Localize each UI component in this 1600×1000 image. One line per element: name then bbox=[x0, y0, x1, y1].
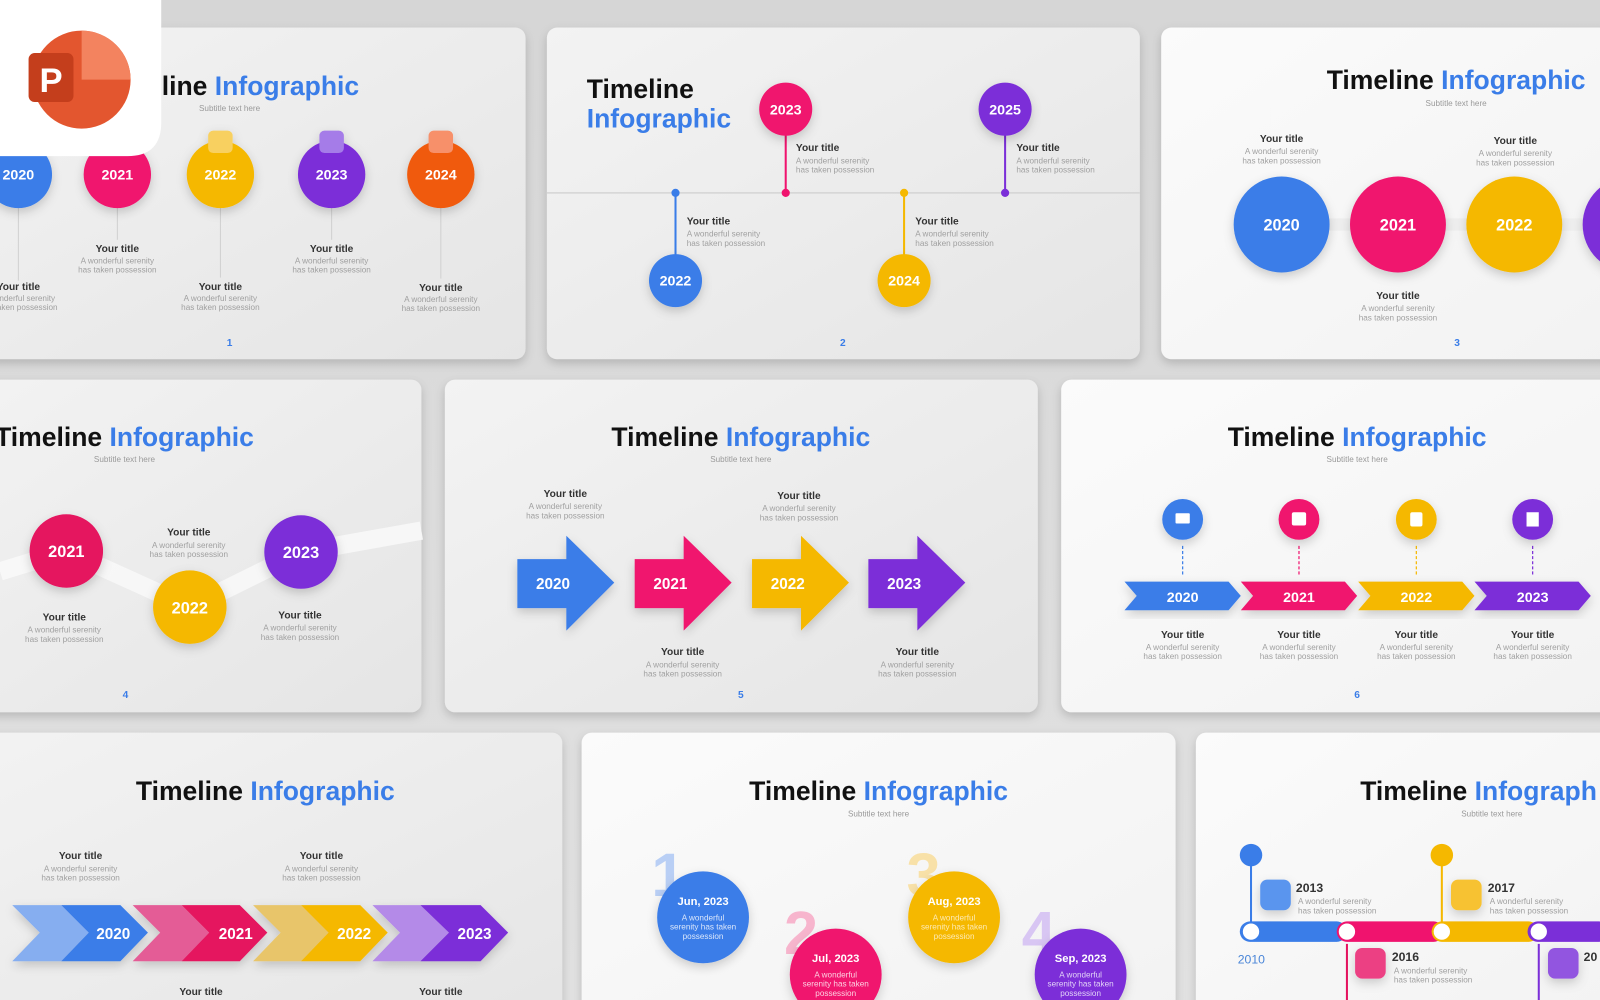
panel: slide 3: has taken possession bbox=[1242, 156, 1321, 165]
panel: slide 4: 2023 bbox=[283, 544, 319, 562]
panel: slide 6: has taken possession bbox=[1143, 652, 1222, 661]
panel: slide 7: 2023 bbox=[457, 926, 492, 943]
panel: slide 6: Your title bbox=[1161, 630, 1205, 641]
panel: slide 2: 2 bbox=[840, 338, 846, 349]
panel: slide 2: Your title bbox=[687, 216, 730, 227]
chevron bar slide 6 bbox=[1124, 582, 1591, 610]
panel: slide 4: has taken possession bbox=[261, 633, 339, 642]
title 7: Timeline Infographic bbox=[136, 776, 395, 806]
panel: slide 6: has taken possession bbox=[1377, 652, 1456, 661]
panel: slide 3: A wonderful serenity bbox=[1479, 149, 1553, 158]
panel: slide 8: serenity has taken bbox=[670, 923, 736, 932]
panel: slide 5: Subtitle text here bbox=[710, 455, 772, 464]
panel: slide 8: A wonderful bbox=[682, 913, 725, 922]
panel: slide 5: A wonderful serenity bbox=[646, 660, 720, 669]
panel: slide 8: Aug, 2023 bbox=[928, 896, 981, 908]
panel: slide 9: has taken possession bbox=[1490, 906, 1568, 915]
panel: slide 2: Your title bbox=[915, 216, 959, 227]
panel: slide 5: Your title bbox=[896, 647, 939, 658]
title 4: Timeline Infographic bbox=[0, 422, 254, 452]
panel: slide 2 bbox=[547, 28, 1140, 359]
panel: slide 8: possession bbox=[934, 932, 974, 941]
panel: slide 5: has taken possession bbox=[878, 670, 957, 679]
panel: slide 4: has taken possession bbox=[150, 550, 228, 559]
panel: slide 7: has taken possession bbox=[41, 874, 120, 883]
panel: slide 8: serenity has taken bbox=[921, 923, 987, 932]
panel: slide 4: A wonderful serenity bbox=[28, 626, 102, 635]
panel: slide 9: has taken possession bbox=[1298, 906, 1376, 915]
panel: slide 4: Subtitle text here bbox=[94, 455, 156, 464]
panel: slide 6: A wonderful serenity bbox=[1380, 643, 1454, 652]
panel: slide 7: Your title bbox=[300, 851, 343, 862]
panel: slide 4: A wonderful serenity bbox=[152, 541, 226, 550]
panel: slide 8: Sep, 2023 bbox=[1055, 953, 1107, 965]
panel: slide 3: Your title bbox=[1494, 136, 1537, 147]
panel: slide 1: 2021 bbox=[101, 168, 133, 184]
panel: slide 2: has taken possession bbox=[796, 165, 874, 174]
panel: slide 9: A wonderful serenity bbox=[1490, 897, 1564, 906]
panel: slide 4 bbox=[0, 380, 421, 712]
panel: slide 2: has taken possession bbox=[1016, 165, 1095, 174]
title 6: Timeline Infographic bbox=[1228, 422, 1487, 452]
panel: slide 9 bbox=[1196, 733, 1600, 1000]
panel: slide 9: 2010 bbox=[1238, 952, 1265, 966]
panel: slide 2: 2023 bbox=[770, 102, 802, 118]
panel: slide 8 bbox=[582, 733, 1176, 1000]
title 9: Timeline Infograph bbox=[1360, 776, 1597, 806]
panel: slide 6: Subtitle text here bbox=[1327, 455, 1388, 464]
panel: slide 5: 2023 bbox=[887, 576, 921, 593]
panel: slide 7: A wonderful serenity bbox=[285, 864, 359, 873]
panel: slide 2: 2024 bbox=[888, 274, 920, 290]
panel: slide 6: has taken possession bbox=[1260, 652, 1338, 661]
panel: slide 6: Your title bbox=[1511, 630, 1555, 641]
panel: slide 3: 2022 bbox=[1496, 217, 1532, 235]
panel: slide 1: A wonderful serenity bbox=[81, 256, 155, 265]
panel: slide 7: A wonderful serenity bbox=[44, 864, 118, 873]
panel: slide 2: A wonderful serenity bbox=[1016, 156, 1091, 165]
panel: slide 3: Subtitle text here bbox=[1426, 99, 1487, 108]
panel: slide 6: A wonderful serenity bbox=[1496, 643, 1570, 652]
panel: slide 2: Your title bbox=[796, 143, 840, 154]
panel: slide 1: 2020 bbox=[2, 168, 34, 184]
panel: slide 4: 4 bbox=[123, 690, 129, 701]
panel: slide 1: has taken possession bbox=[292, 265, 371, 274]
panel: slide 7: has taken possession bbox=[282, 874, 361, 883]
panel: slide 5 bbox=[445, 380, 1038, 712]
panel: slide 5: has taken possession bbox=[643, 670, 722, 679]
panel: slide 9: Subtitle text here bbox=[1461, 809, 1523, 818]
panel: slide 2: has taken possession bbox=[687, 239, 765, 248]
panel: slide 8: 1 bbox=[651, 841, 685, 909]
panel: slide 1: has taken possession bbox=[78, 265, 157, 274]
panel: slide 9: has taken possession bbox=[1394, 976, 1472, 985]
circles slide 1 bbox=[0, 131, 474, 208]
panel: slide 2: 2025 bbox=[989, 102, 1021, 118]
panel: slide 3: has taken possession bbox=[1476, 158, 1555, 167]
panel: slide 8: serenity has taken bbox=[1048, 980, 1114, 989]
panel: slide 9: 2017 bbox=[1488, 881, 1515, 895]
panel: slide 3: 2021 bbox=[1380, 217, 1416, 235]
panel: slide 8: Jun, 2023 bbox=[677, 896, 729, 908]
panel: slide 6: 2022 bbox=[1400, 590, 1432, 606]
panel: slide 8: 2 bbox=[784, 899, 818, 967]
panel: slide 7: 2020 bbox=[96, 926, 130, 943]
panel: slide 8: A wonderful bbox=[814, 971, 857, 980]
panel: slide 8: serenity has taken bbox=[803, 980, 869, 989]
panel: slide 1: Subtitle text here bbox=[199, 104, 261, 113]
panel: slide 6: 2023 bbox=[1517, 590, 1549, 606]
panel: slide 9: 2016 bbox=[1392, 950, 1419, 964]
panel: slide 1: has taken possession bbox=[181, 303, 260, 312]
panel: slide 5: has taken possession bbox=[760, 513, 838, 522]
title 1: Timeline Infographic bbox=[100, 71, 359, 101]
panel: slide 4: Your title bbox=[43, 612, 86, 623]
panel: slide 4: Your title bbox=[167, 528, 211, 539]
panel: slide 2: A wonderful serenity bbox=[687, 230, 761, 239]
panel: slide 1: Your title bbox=[310, 244, 354, 255]
panel: slide 6: A wonderful serenity bbox=[1146, 643, 1220, 652]
panel: slide 5: 2021 bbox=[653, 576, 688, 593]
panel: slide 8: Subtitle text here bbox=[848, 809, 910, 818]
panel: slide 4: 2022 bbox=[172, 599, 208, 617]
panel: slide 2: has taken possession bbox=[915, 239, 994, 248]
panel: slide 7: Your title bbox=[419, 987, 463, 998]
panel: slide 5: 5 bbox=[738, 690, 744, 701]
panel: slide 2: Your title bbox=[1016, 143, 1060, 154]
panel: slide 3: Your title bbox=[1376, 291, 1420, 302]
panel: slide 5: A wonderful serenity bbox=[762, 504, 837, 513]
panel: slide 5: A wonderful serenity bbox=[881, 660, 955, 669]
panel: slide 8: 3 bbox=[906, 841, 941, 909]
panel: slide 9: A wonderful serenity bbox=[1298, 897, 1372, 906]
panel: slide 1 bbox=[0, 28, 526, 359]
panel: slide 1: 1 bbox=[227, 338, 233, 349]
panel: slide 7: 2022 bbox=[337, 926, 371, 943]
panel: slide 4: Your title bbox=[278, 610, 322, 621]
panel: slide 6: A wonderful serenity bbox=[1262, 643, 1337, 652]
panel: slide 1: 2024 bbox=[425, 168, 457, 184]
panel: slide 3: has taken possession bbox=[1359, 313, 1437, 322]
panel: slide 6: has taken possession bbox=[1493, 652, 1572, 661]
title 2 bbox=[587, 74, 731, 134]
arrows slide 5 bbox=[517, 536, 965, 631]
panel: slide 1: A wonderful serenity bbox=[404, 295, 478, 304]
panel: slide 5: Your title bbox=[777, 491, 821, 502]
panel: slide 4: has taken possession bbox=[25, 635, 104, 644]
icon: powerpoint logo: P bbox=[39, 62, 63, 100]
panel: slide 5: 2022 bbox=[771, 576, 805, 593]
title 3: Timeline Infographic bbox=[1327, 65, 1586, 95]
panel: slide 1: 2023 bbox=[316, 168, 348, 184]
panel: slide 9: A wonderful serenity bbox=[1394, 966, 1468, 975]
panel: slide 5: A wonderful serenity bbox=[529, 502, 603, 511]
panel: slide 2: A wonderful serenity bbox=[796, 156, 870, 165]
panel: slide 7: Your title bbox=[179, 987, 223, 998]
panel: slide 1: 2022 bbox=[205, 168, 236, 184]
panel: slide 3: Your title bbox=[1260, 134, 1304, 145]
panel: slide 6: 2020 bbox=[1167, 590, 1199, 606]
panel: slide 1: has taken possession bbox=[402, 304, 480, 313]
panel: slide 5: Your title bbox=[544, 489, 587, 500]
panel: slide 1: Your title bbox=[96, 244, 139, 255]
panel: slide 3: 2020 bbox=[1263, 217, 1300, 235]
title 2: Timeline bbox=[587, 74, 694, 104]
title 2: Infographic bbox=[587, 104, 731, 134]
panel: slide 1: Your title bbox=[419, 283, 463, 294]
title 5: Timeline Infographic bbox=[611, 422, 870, 452]
panel: slide 2: 2022 bbox=[660, 274, 691, 290]
panel: slide 5: has taken possession bbox=[526, 511, 605, 520]
panel: slide 9: 20 bbox=[1584, 950, 1597, 964]
panel: slide 3: A wonderful serenity bbox=[1361, 304, 1436, 313]
panel: slide 8: possession bbox=[1060, 989, 1101, 998]
panel: slide 6 bbox=[1061, 380, 1600, 712]
panel: slide 7: Your title bbox=[59, 851, 103, 862]
panel: slide 8: A wonderful bbox=[933, 913, 976, 922]
panel: slide 4: 2021 bbox=[48, 543, 84, 561]
panel: slide 1: A wonderful serenity bbox=[184, 294, 258, 303]
panel: slide 6: 6 bbox=[1354, 690, 1360, 701]
panel: slide 5: 2020 bbox=[536, 576, 570, 593]
panel: slide 3: 3 bbox=[1454, 338, 1460, 349]
panel: slide 6: 2021 bbox=[1283, 590, 1315, 606]
panel: slide 7 bbox=[0, 733, 562, 1000]
panel: slide 6: Your title bbox=[1395, 630, 1438, 641]
panel: slide 1: A wonderful serenity bbox=[295, 256, 369, 265]
timeline bar slide 9 bbox=[1240, 921, 1600, 942]
panel: slide 6: Your title bbox=[1277, 630, 1321, 641]
panel: slide 8: possession bbox=[815, 989, 856, 998]
panel: slide 9: 2013 bbox=[1296, 881, 1323, 895]
panel: slide 3 bbox=[1161, 28, 1600, 359]
panel: slide 7: 2021 bbox=[219, 926, 253, 943]
panel: slide 8: 4 bbox=[1022, 899, 1056, 967]
panel: slide 2: A wonderful serenity bbox=[915, 230, 990, 239]
panel: slide 8: possession bbox=[683, 932, 723, 941]
panel: slide 3: A wonderful serenity bbox=[1245, 147, 1319, 156]
title 8: Timeline Infographic bbox=[749, 776, 1008, 806]
panel: slide 8: Jul, 2023 bbox=[812, 953, 859, 965]
panel: slide 1: Your title bbox=[199, 282, 242, 293]
panel: slide 4: A wonderful serenity bbox=[263, 624, 338, 633]
panel: slide 5: Your title bbox=[661, 647, 705, 658]
panel: slide 8: A wonderful bbox=[1059, 971, 1102, 980]
chevrons slide 7 bbox=[12, 905, 508, 961]
icon: powerpoint logo bbox=[0, 0, 161, 156]
